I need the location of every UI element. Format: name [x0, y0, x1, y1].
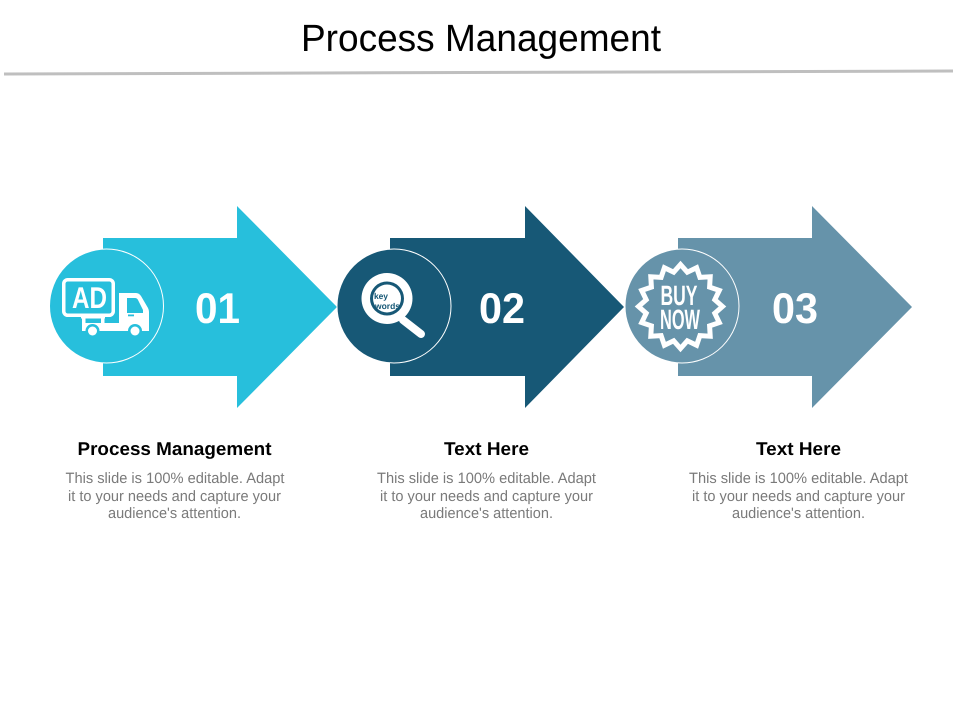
- number 03: 03: [772, 285, 818, 333]
- body text column 2: This slide is 100% editable. Adapt: [377, 470, 597, 487]
- text block: column 3: [689, 438, 909, 522]
- text block: column 1: [66, 438, 285, 522]
- heading: Process Management: Process Management: [78, 438, 272, 459]
- circle 01: [50, 249, 164, 363]
- icon: buy now badge: BUY: [660, 280, 698, 311]
- number 02: 02: [479, 285, 525, 333]
- text block: column 2: [377, 438, 597, 522]
- body text column 1: audience's attention.: [108, 505, 241, 522]
- title: Process Management: [301, 18, 661, 60]
- body text column 2: audience's attention.: [420, 505, 553, 522]
- body text column 3: [689, 470, 909, 522]
- number 01: 01: [195, 285, 240, 333]
- body text column 1: it to your needs and capture your: [68, 488, 281, 505]
- icon: advertising truck: [64, 280, 149, 338]
- body text column 3: This slide is 100% editable. Adapt: [689, 470, 909, 487]
- icon: magnifier with key words: [362, 273, 421, 334]
- body text column 3: audience's attention.: [732, 505, 865, 522]
- icon: buy now badge: [638, 264, 722, 348]
- circle 02: [337, 249, 451, 363]
- icon: buy now badge: NOW: [660, 304, 700, 335]
- arrow 02: [390, 206, 624, 408]
- body text column 2: it to your needs and capture your: [380, 488, 593, 505]
- body text column 1: [66, 470, 285, 522]
- icon: magnifier with key words: words: [374, 301, 400, 311]
- arrow 03: [678, 206, 912, 408]
- arrow 01: [103, 206, 337, 408]
- circle 03: [625, 249, 739, 363]
- panel: step 02 arrow: [337, 206, 624, 408]
- heading: Text Here 3: Text Here: [756, 438, 841, 459]
- icon: advertising truck: AD: [72, 282, 107, 315]
- panel: step 03 arrow: [625, 206, 912, 408]
- body text column 2: [377, 470, 597, 522]
- panel: step 01 arrow: [50, 206, 337, 408]
- body text column 3: it to your needs and capture your: [692, 488, 905, 505]
- heading: Text Here 2: Text Here: [444, 438, 529, 459]
- body text column 1: This slide is 100% editable. Adapt: [66, 470, 285, 487]
- icon: magnifier with key words: key: [374, 291, 388, 301]
